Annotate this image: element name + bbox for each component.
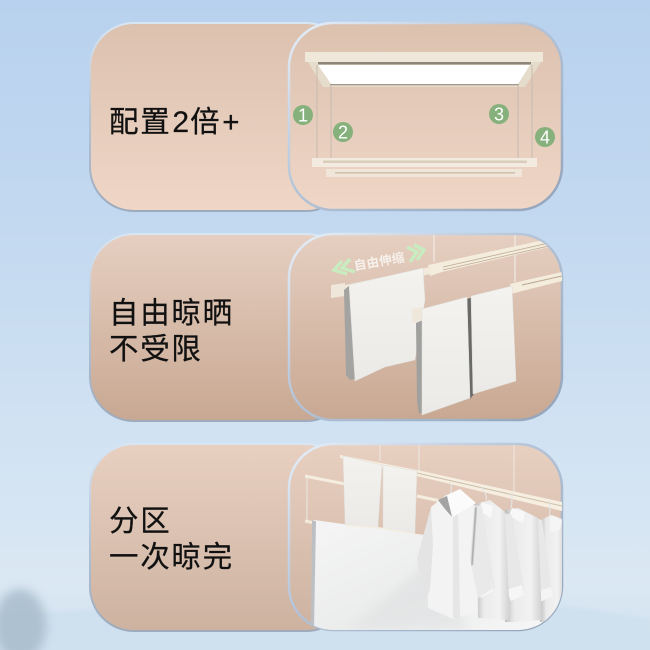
illustration: sheet, towels and shirts [305, 444, 565, 630]
panel: zoned drying [90, 444, 565, 631]
stretch label: 自由伸缩 [353, 250, 406, 273]
marker 3: 3 [494, 104, 504, 124]
marker 3 [489, 104, 509, 124]
heading: 配置2倍+ [109, 106, 240, 139]
text card [90, 444, 350, 631]
shirt 2 [472, 500, 510, 620]
subheading: 一次晾完 [109, 541, 234, 574]
hangers [449, 482, 550, 517]
marker 2: 2 [338, 122, 348, 142]
shirt 4 [538, 515, 562, 622]
stretch label [334, 245, 424, 274]
towels right [416, 286, 516, 415]
image card [289, 23, 562, 210]
marker 4 [535, 127, 555, 148]
icon: left chevrons [334, 259, 355, 274]
icon: right chevrons [407, 245, 424, 262]
text card [90, 23, 350, 211]
shirts [417, 482, 565, 622]
marker 2 [333, 122, 353, 142]
illustration: towels on extending rails [331, 234, 562, 415]
heading: 自由晾晒 [109, 297, 234, 330]
illustration: drying rack with light [293, 52, 555, 177]
shirt 1 [417, 489, 492, 619]
text card [90, 234, 350, 421]
panel: configuration [90, 23, 562, 211]
marker 1: 1 [298, 106, 308, 126]
subheading: 不受限 [109, 333, 203, 366]
shirt 3 [503, 508, 542, 622]
image card [289, 234, 562, 420]
sheet [314, 520, 562, 630]
marker 4: 4 [540, 128, 550, 148]
towels [343, 456, 417, 535]
marker 1 [293, 105, 313, 126]
image card [289, 444, 562, 630]
heading: 分区 [109, 505, 171, 538]
panel: free drying [90, 234, 562, 421]
towel left [344, 268, 425, 381]
